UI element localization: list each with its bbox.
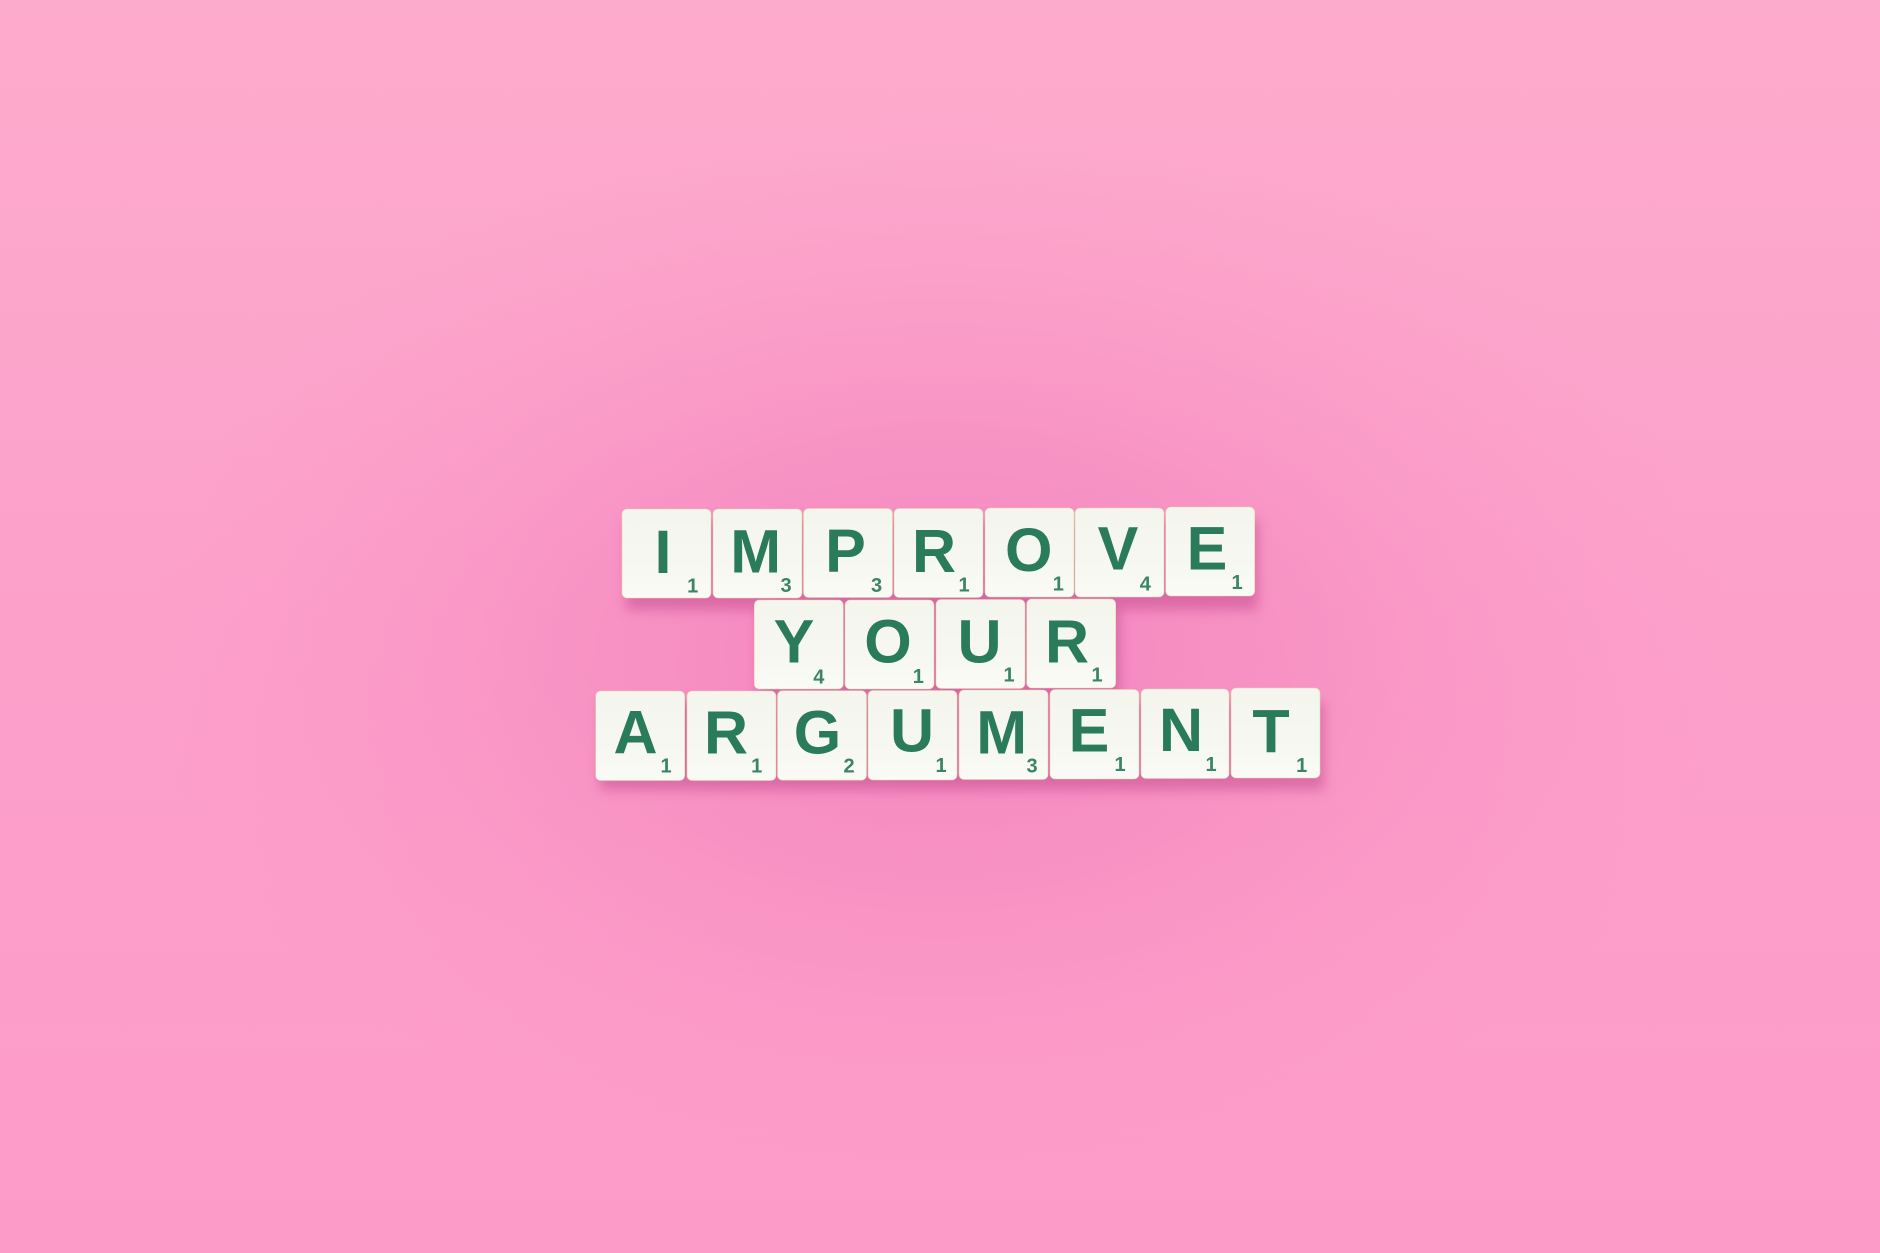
tile: R [894, 508, 983, 598]
tile: R [687, 691, 776, 780]
tile: R [1027, 599, 1116, 688]
tile: T: 1 [1296, 755, 1307, 777]
tile: U [868, 690, 957, 780]
tile: U: U [890, 697, 934, 765]
tile: R: 1 [751, 756, 762, 778]
tile: O [985, 508, 1074, 597]
tile: V: V [1098, 514, 1139, 582]
tile shadows [600, 520, 1324, 790]
tile: M: M [730, 518, 781, 586]
tile: I [622, 509, 711, 598]
tile: M: 3 [1026, 756, 1038, 778]
tile: N: 1 [1205, 754, 1217, 776]
tile: I: I [655, 518, 671, 586]
tile: M [959, 690, 1048, 780]
tile: U: 1 [1003, 665, 1015, 687]
word: IMPROVE [622, 507, 1255, 598]
tile: Y: 4 [813, 666, 825, 688]
tile: N: N [1159, 696, 1203, 764]
tile: R: R [704, 698, 748, 766]
word: ARGUMENT [596, 688, 1320, 780]
tile: A: 1 [660, 756, 672, 778]
tile: N [1141, 689, 1229, 778]
tile: E: 1 [1114, 754, 1126, 776]
tile: M: 3 [780, 575, 792, 597]
tile: O: O [1005, 516, 1052, 584]
tile: G: G [794, 698, 841, 766]
tile: V [1075, 508, 1164, 597]
tile: O [845, 600, 934, 689]
tile: T [1231, 688, 1320, 778]
tile: R: 1 [1091, 665, 1103, 687]
tile: M: M [976, 698, 1027, 766]
tile: E [1166, 507, 1255, 596]
tile: E: 1 [1231, 572, 1243, 594]
tile: V: 4 [1140, 574, 1152, 596]
word: YOUR [754, 599, 1116, 689]
tile: P: P [825, 517, 866, 585]
tile: E: E [1187, 514, 1227, 582]
tile: R: 1 [958, 574, 970, 596]
tile: R: R [912, 517, 956, 585]
tile: U: U [957, 608, 1002, 676]
tile: P [804, 508, 892, 598]
tile: G [778, 691, 866, 780]
tile: M [713, 509, 802, 598]
tile: O: O [864, 608, 912, 676]
tile: G: 2 [843, 756, 855, 778]
tile: E [1050, 690, 1139, 779]
tile: R: R [1045, 607, 1089, 675]
tile: A [596, 691, 685, 780]
tile: T: T [1252, 698, 1290, 766]
tile: O: 1 [1053, 574, 1064, 596]
tile: O: 1 [913, 666, 924, 688]
tile: U [936, 600, 1025, 688]
tile: P: 3 [871, 575, 882, 597]
tile: A: A [613, 698, 658, 766]
tile: U: 1 [935, 755, 947, 777]
tile: Y [754, 600, 843, 689]
tile: Y: Y [774, 608, 814, 676]
tile: I: 1 [687, 576, 698, 598]
tile: E: E [1069, 697, 1109, 765]
